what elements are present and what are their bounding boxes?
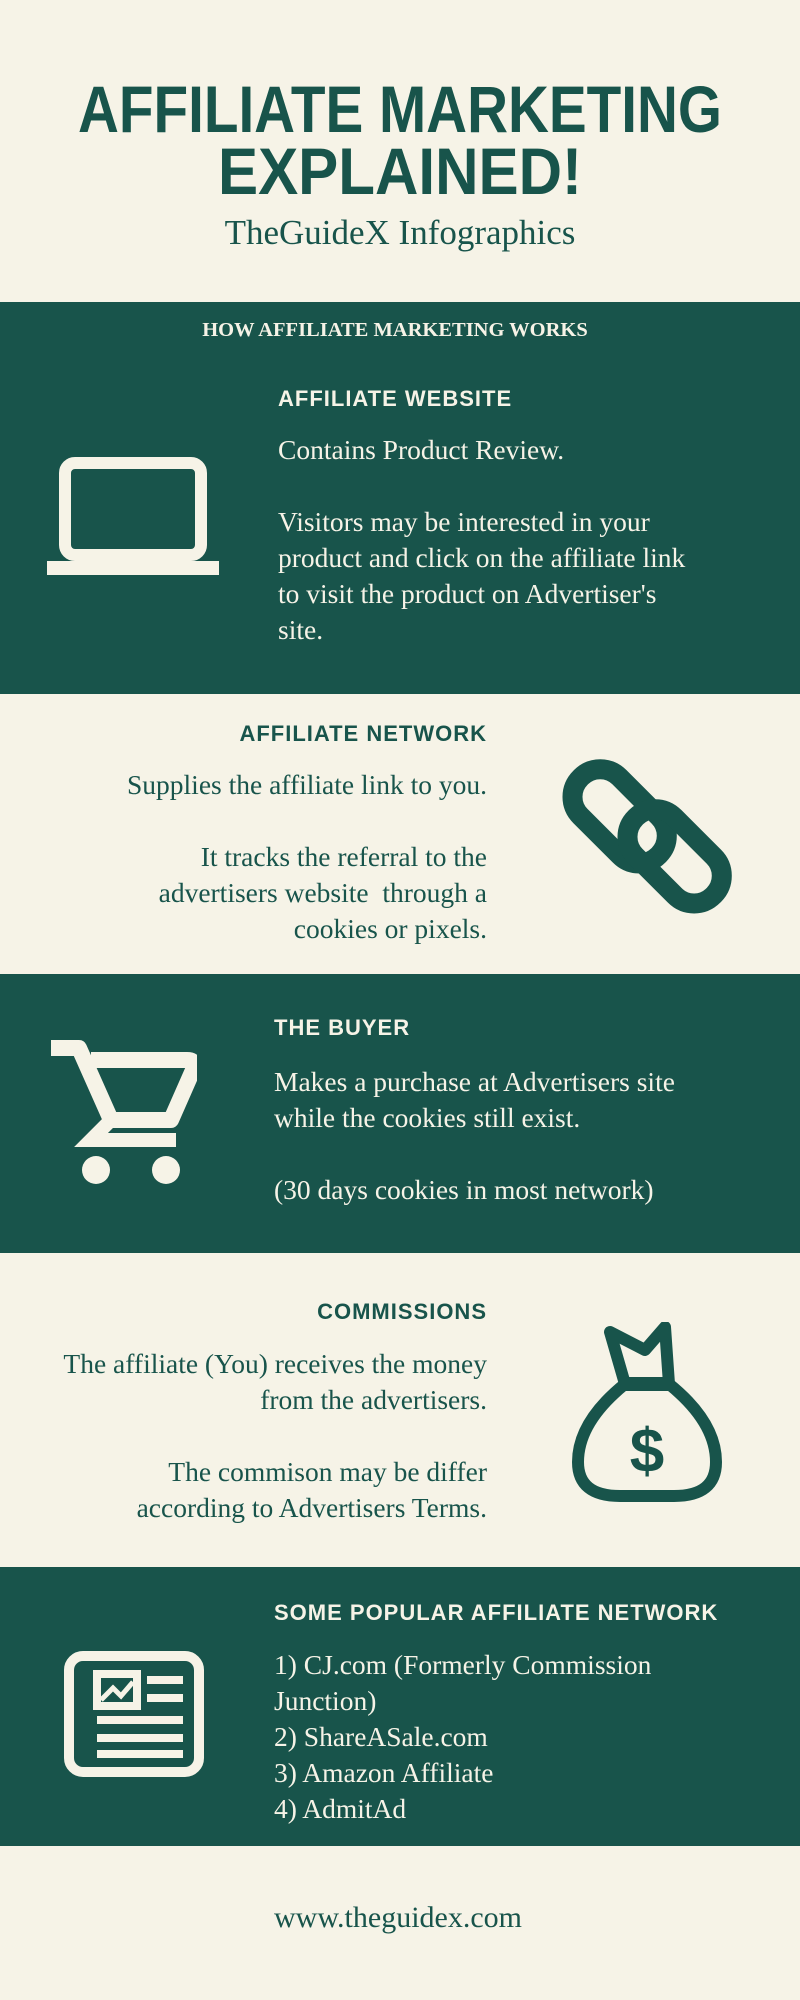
text block: from the advertisers.	[260, 1384, 487, 1415]
title: EXPLAINED!	[218, 134, 582, 208]
section header: HOW AFFILIATE MARKETING WORKS	[202, 319, 588, 341]
heading: AFFILIATE WEBSITE	[278, 386, 512, 411]
text block	[127, 769, 487, 944]
icon: newspaper	[64, 1651, 204, 1777]
subtitle: TheGuideX Infographics	[225, 213, 575, 252]
icon: shopping cart	[51, 1040, 197, 1184]
list: Junction)	[274, 1685, 376, 1716]
text block: advertisers website through a	[159, 877, 487, 908]
panel: commissions	[63, 1299, 722, 1523]
panel: affiliate website	[0, 302, 800, 694]
panel: popular affiliate networks	[0, 1567, 800, 1846]
text block: while the cookies still exist.	[274, 1102, 580, 1133]
icon: laptop	[47, 457, 219, 575]
icon: money bag	[572, 1322, 722, 1502]
text block: cookies or pixels.	[294, 913, 487, 944]
icon: chain link	[562, 759, 732, 914]
heading: THE BUYER	[274, 1015, 410, 1040]
footer url: www.theguidex.com	[274, 1901, 522, 1934]
list: 2) ShareASale.com	[274, 1721, 488, 1752]
text block: Visitors may be interested in your	[278, 506, 650, 537]
heading: AFFILIATE NETWORK	[239, 721, 487, 746]
panel: the buyer	[0, 974, 800, 1253]
text block: (30 days cookies in most network)	[274, 1174, 654, 1205]
list: 3) Amazon Affiliate	[274, 1757, 493, 1788]
text block: according to Advertisers Terms.	[137, 1492, 487, 1523]
list: 1) CJ.com (Formerly Commission	[274, 1649, 651, 1680]
heading: SOME POPULAR AFFILIATE NETWORK	[274, 1600, 718, 1625]
heading: COMMISSIONS	[317, 1299, 487, 1324]
text block	[278, 434, 686, 645]
text block: The commison may be differ	[168, 1456, 487, 1487]
text block: The affiliate (You) receives the money	[63, 1348, 487, 1379]
text block: product and click on the affiliate link	[278, 542, 685, 573]
text block: Makes a purchase at Advertisers site	[274, 1066, 675, 1097]
list: 4) AdmitAd	[274, 1793, 406, 1824]
text block	[63, 1348, 487, 1523]
text block: Contains Product Review.	[278, 434, 564, 465]
icon: money bag: $	[630, 1417, 664, 1486]
text block: Supplies the affiliate link to you.	[127, 769, 487, 800]
title	[78, 72, 722, 208]
text block: It tracks the referral to the	[201, 841, 487, 872]
text block: site.	[278, 614, 323, 645]
list	[274, 1649, 651, 1824]
text block: to visit the product on Advertiser's	[278, 578, 656, 609]
text block	[274, 1066, 675, 1205]
panel: affiliate network	[127, 721, 732, 944]
